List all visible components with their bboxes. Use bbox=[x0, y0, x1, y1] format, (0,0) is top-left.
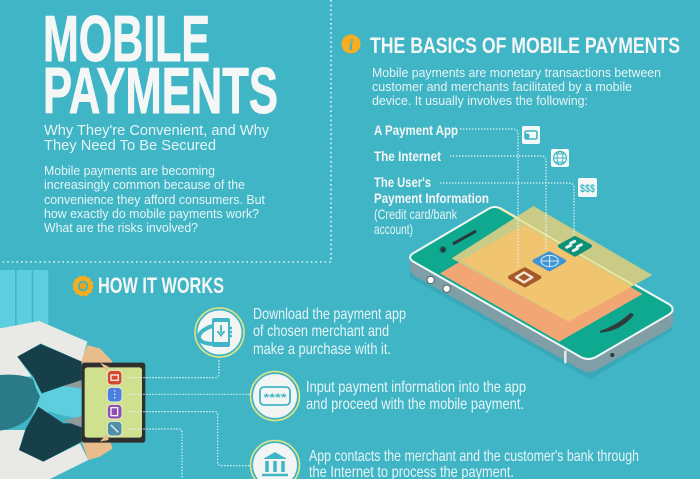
app icon: card bbox=[510, 269, 539, 285]
step 2 text: Input payment information into the app bbox=[306, 379, 526, 396]
upper trousers bbox=[17, 344, 82, 393]
basics text: Mobile payments are monetary transactions between bbox=[372, 65, 661, 80]
step 3 icon bbox=[250, 440, 300, 479]
shoe bbox=[63, 380, 82, 388]
label: the internet bbox=[374, 148, 546, 250]
intro text: how exactly do mobile payments work? bbox=[44, 206, 259, 221]
label: the user's payment information bbox=[374, 174, 574, 237]
icon: globe tile bbox=[551, 149, 569, 167]
lower trousers bbox=[19, 407, 82, 462]
step 1 text: of chosen merchant and bbox=[253, 323, 389, 340]
background stripes bbox=[0, 270, 48, 423]
lower sleeve bbox=[0, 430, 88, 479]
basics text: device. It usually involves the following: bbox=[372, 93, 588, 108]
upper hand bbox=[82, 345, 113, 372]
panel overlap bbox=[461, 225, 632, 322]
person with tablet bbox=[0, 270, 250, 479]
step 1 text: make a purchase with it. bbox=[253, 341, 391, 358]
title bbox=[43, 2, 278, 127]
label: the user's payment information: The User's bbox=[374, 174, 431, 190]
intro text: Mobile payments are becoming bbox=[44, 163, 215, 178]
app icon: globe bbox=[535, 253, 564, 269]
icon: card tile bbox=[522, 126, 540, 144]
subtitle: Why They're Convenient, and Why bbox=[44, 122, 269, 139]
step 1 bbox=[195, 306, 406, 358]
phone shadow bbox=[410, 210, 673, 379]
step 2 icon bbox=[250, 372, 300, 420]
upper sleeve bbox=[0, 321, 87, 377]
basics text: customer and merchants facilitated by a mobile bbox=[372, 79, 632, 94]
intro text bbox=[44, 163, 265, 235]
phone face bbox=[410, 207, 673, 359]
head bbox=[0, 375, 40, 431]
label: the user's payment information: (Credit card/bank bbox=[374, 206, 458, 222]
screen bbox=[440, 225, 643, 342]
tablet bbox=[82, 363, 145, 443]
speaker and camera bbox=[454, 232, 475, 243]
icon: info: i bbox=[349, 37, 354, 54]
icon: info bbox=[342, 34, 360, 54]
step 1 text: Download the payment app bbox=[253, 306, 406, 323]
phone illustration bbox=[410, 206, 673, 379]
label: the user's payment information: Payment Information bbox=[374, 190, 489, 206]
label: a payment app bbox=[374, 122, 518, 268]
subtitle: They Need To Be Secured bbox=[44, 137, 216, 154]
icon: dollars tile: $$$ bbox=[580, 183, 595, 195]
connector lines bbox=[128, 358, 250, 479]
label: a payment app: A Payment App bbox=[374, 122, 458, 138]
intro text: What are the risks involved? bbox=[44, 220, 198, 235]
heading: how it works: HOW IT WORKS bbox=[98, 273, 224, 298]
icon: gear bbox=[74, 276, 92, 296]
step 1 text bbox=[253, 306, 406, 358]
app icon: money bbox=[560, 238, 590, 255]
step 2 text: and proceed with the mobile payment. bbox=[306, 396, 524, 413]
intro text: convenience they afford consumers. But bbox=[44, 192, 265, 207]
step 2 text bbox=[306, 379, 526, 413]
label: the internet: The Internet bbox=[374, 148, 441, 164]
title: PAYMENTS bbox=[43, 54, 278, 127]
step 2 bbox=[250, 372, 526, 420]
basics text bbox=[372, 65, 661, 108]
step 1 icon bbox=[195, 308, 244, 357]
title: MOBILE bbox=[43, 2, 210, 75]
lower hand bbox=[82, 433, 113, 460]
lap gap bbox=[39, 384, 83, 418]
step 3 text bbox=[309, 448, 639, 479]
icon: dollars tile bbox=[578, 178, 597, 197]
step 3 bbox=[250, 440, 639, 479]
side details bbox=[562, 351, 569, 363]
phone side bbox=[410, 255, 673, 372]
intro text: increasingly common because of the bbox=[44, 177, 245, 192]
subtitle bbox=[44, 122, 269, 154]
shoe bbox=[63, 416, 82, 427]
app buttons bbox=[107, 370, 122, 436]
step 2 icon: **** bbox=[264, 392, 287, 404]
translucent panel bbox=[452, 206, 652, 322]
label: the user's payment information: account) bbox=[374, 221, 413, 237]
